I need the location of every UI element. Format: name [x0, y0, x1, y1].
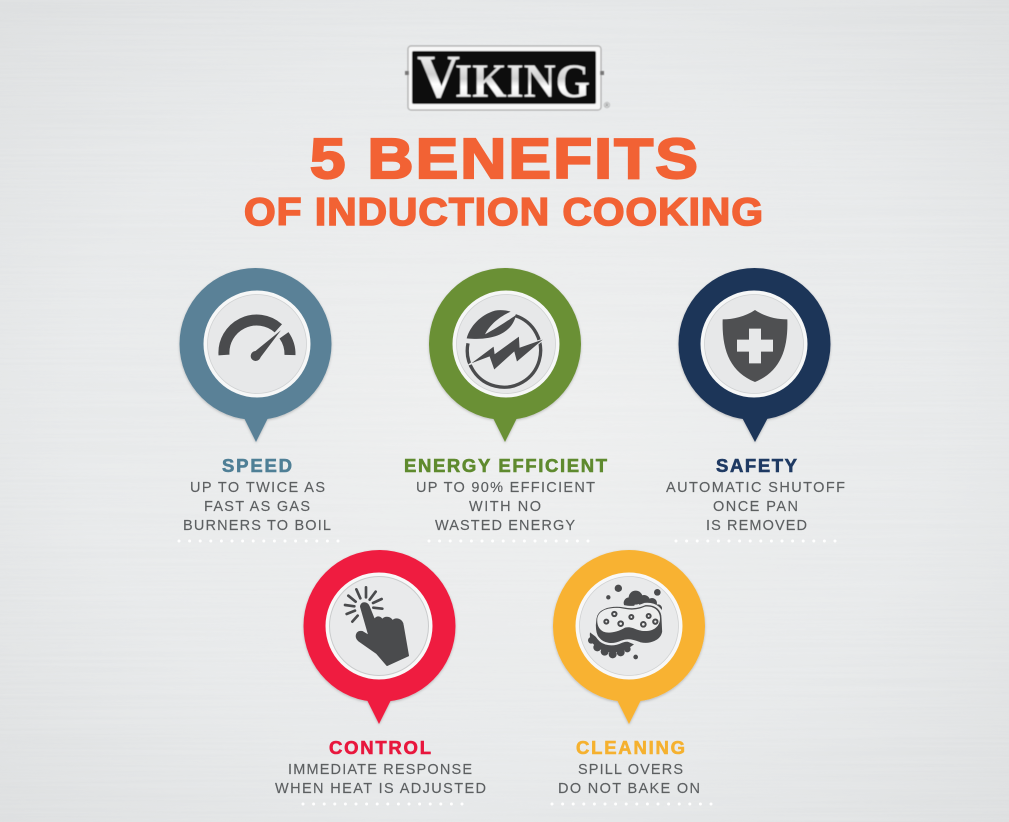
text block: speed — [183, 455, 331, 534]
text block: safety: AUTOMATIC SHUTOFF — [666, 480, 845, 496]
pin: control — [304, 550, 456, 724]
title: 5 BENEFITS — [310, 127, 700, 191]
text block: cleaning: SPILL OVERS — [578, 762, 683, 778]
text block: safety — [666, 455, 845, 534]
logo: Viking badge — [405, 44, 610, 111]
text block: energy efficient: ENERGY EFFICIENT — [404, 455, 608, 476]
text block: control: CONTROL — [329, 737, 431, 758]
logo: Viking badge: V — [417, 44, 460, 111]
text block: safety: SAFETY — [716, 455, 798, 476]
text block: speed: UP TO TWICE AS — [190, 480, 325, 496]
text block: energy efficient: WASTED ENERGY — [435, 518, 575, 534]
text block: control: WHEN HEAT IS ADJUSTED — [275, 781, 486, 797]
text block: safety: ONCE PAN — [713, 499, 798, 515]
text block: energy efficient — [404, 455, 608, 534]
text block: cleaning: DO NOT BAKE ON — [558, 781, 700, 797]
icon: shield with cross — [723, 310, 787, 382]
text block: safety: IS REMOVED — [706, 518, 807, 534]
text block: energy efficient: UP TO 90% EFFICIENT — [416, 480, 595, 496]
text block: speed: FAST AS GAS — [204, 499, 310, 515]
pin: speed — [180, 268, 332, 442]
icon: pointing hand with click rays — [345, 587, 408, 665]
logo: Viking badge: IKING — [455, 55, 590, 108]
text block: energy efficient: WITH NO — [469, 499, 541, 515]
text block: control — [275, 737, 486, 797]
text block: speed: SPEED — [222, 455, 292, 476]
title: OF INDUCTION COOKING — [244, 191, 764, 234]
text block: control: IMMEDIATE RESPONSE — [288, 762, 472, 778]
pin: energy efficient — [429, 268, 581, 442]
pin: cleaning — [553, 550, 705, 724]
icon: speedometer — [224, 320, 290, 361]
icon: sponge with bubbles — [588, 585, 663, 659]
dotted dividers — [179, 541, 836, 804]
text block: cleaning: CLEANING — [576, 737, 685, 758]
text block: speed: BURNERS TO BOIL — [183, 518, 331, 534]
logo: Viking badge: ® — [604, 101, 610, 110]
icon: leaf and lightning bolt — [467, 310, 545, 387]
title — [244, 127, 764, 234]
text block: cleaning — [558, 737, 700, 797]
pin: safety — [678, 268, 830, 442]
